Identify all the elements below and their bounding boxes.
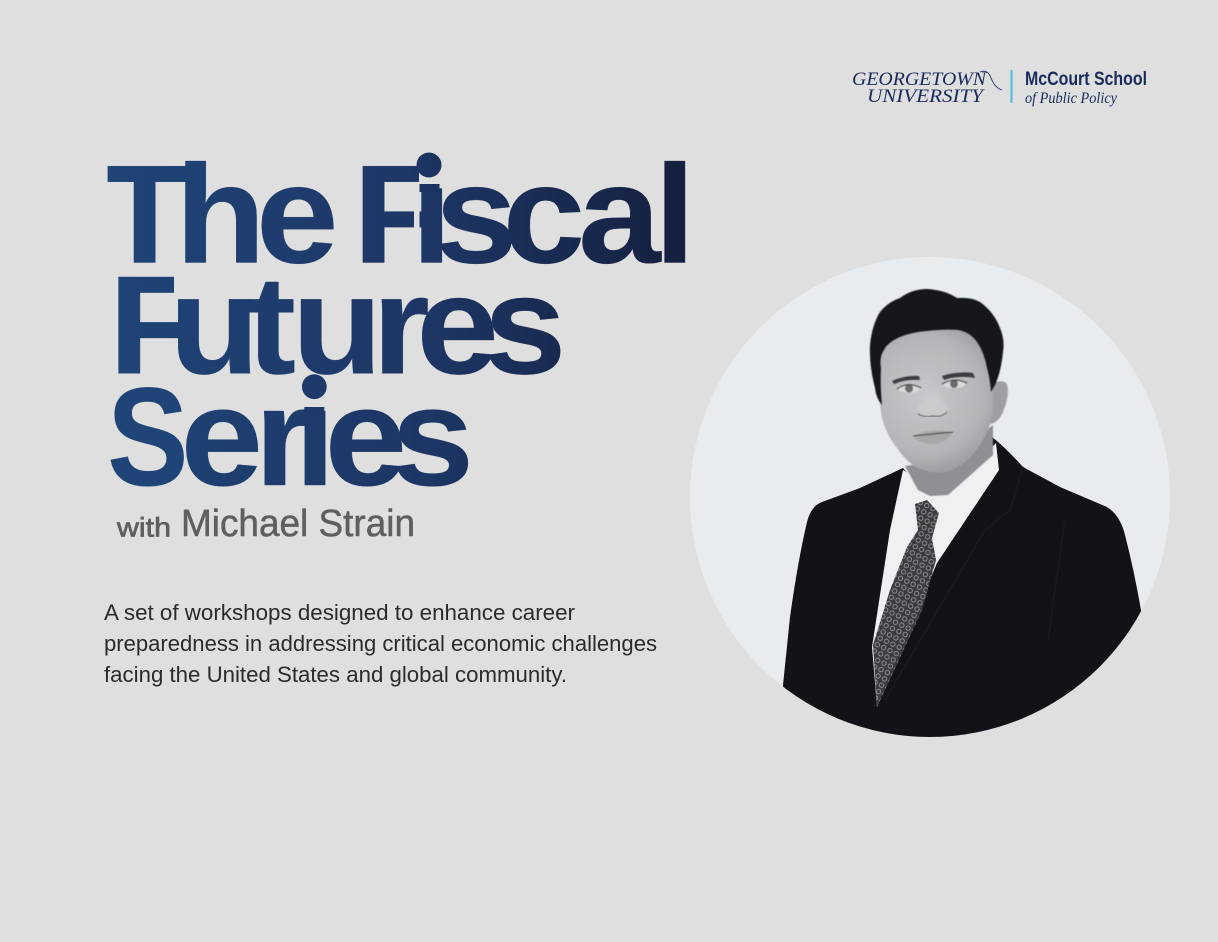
- jacket: [783, 437, 1141, 760]
- logo text: McCourt School of Public Policy: [1025, 69, 1147, 107]
- description text: A set of workshops designed to enhance career: [104, 600, 575, 625]
- logo text: McCourt School of Public Policy: McCourt School: [1025, 69, 1147, 90]
- logo divider: [1010, 70, 1012, 103]
- title line 3: S: [107, 358, 188, 515]
- title line 3: [110, 374, 468, 487]
- ear: [990, 381, 1008, 424]
- logo: Georgetown University and McCourt School: [852, 69, 1147, 107]
- description text: facing the United States and global community.: [104, 662, 567, 687]
- title line 1: The Fiscal: [99, 135, 695, 293]
- hair: [870, 289, 1004, 405]
- eyebrows: [892, 372, 975, 384]
- title: The Fiscal Futures Series: [99, 135, 695, 515]
- title line 3: eries: [181, 358, 474, 515]
- eyes: [897, 380, 967, 393]
- description text: [104, 600, 657, 687]
- logo text: Georgetown University: UNIVERSITY: [867, 86, 986, 107]
- face: [878, 322, 994, 472]
- mouth: [913, 431, 953, 444]
- person illustration: [783, 289, 1141, 760]
- portrait background circle: [690, 257, 1170, 737]
- title line 2: Futures: [109, 246, 566, 403]
- logo text: Georgetown University: [852, 69, 1002, 107]
- logo text: McCourt School of Public Policy: of Public Policy: [1025, 90, 1117, 107]
- description text: preparedness in addressing critical economic challenges: [104, 631, 657, 656]
- subtitle: with Michael Strain: with: [116, 512, 171, 542]
- shirt: [872, 443, 999, 707]
- nose: [921, 401, 946, 415]
- portrait: circular photo of Michael Strain: [690, 257, 1170, 760]
- jacket lapel shading: [885, 467, 1065, 700]
- neck: [905, 425, 993, 496]
- logo text: Georgetown University: GEORGETOWN: [852, 69, 987, 90]
- title line 1: [108, 152, 686, 264]
- subtitle: with Michael Strain: Michael Strain: [181, 503, 415, 545]
- tie: [873, 500, 939, 707]
